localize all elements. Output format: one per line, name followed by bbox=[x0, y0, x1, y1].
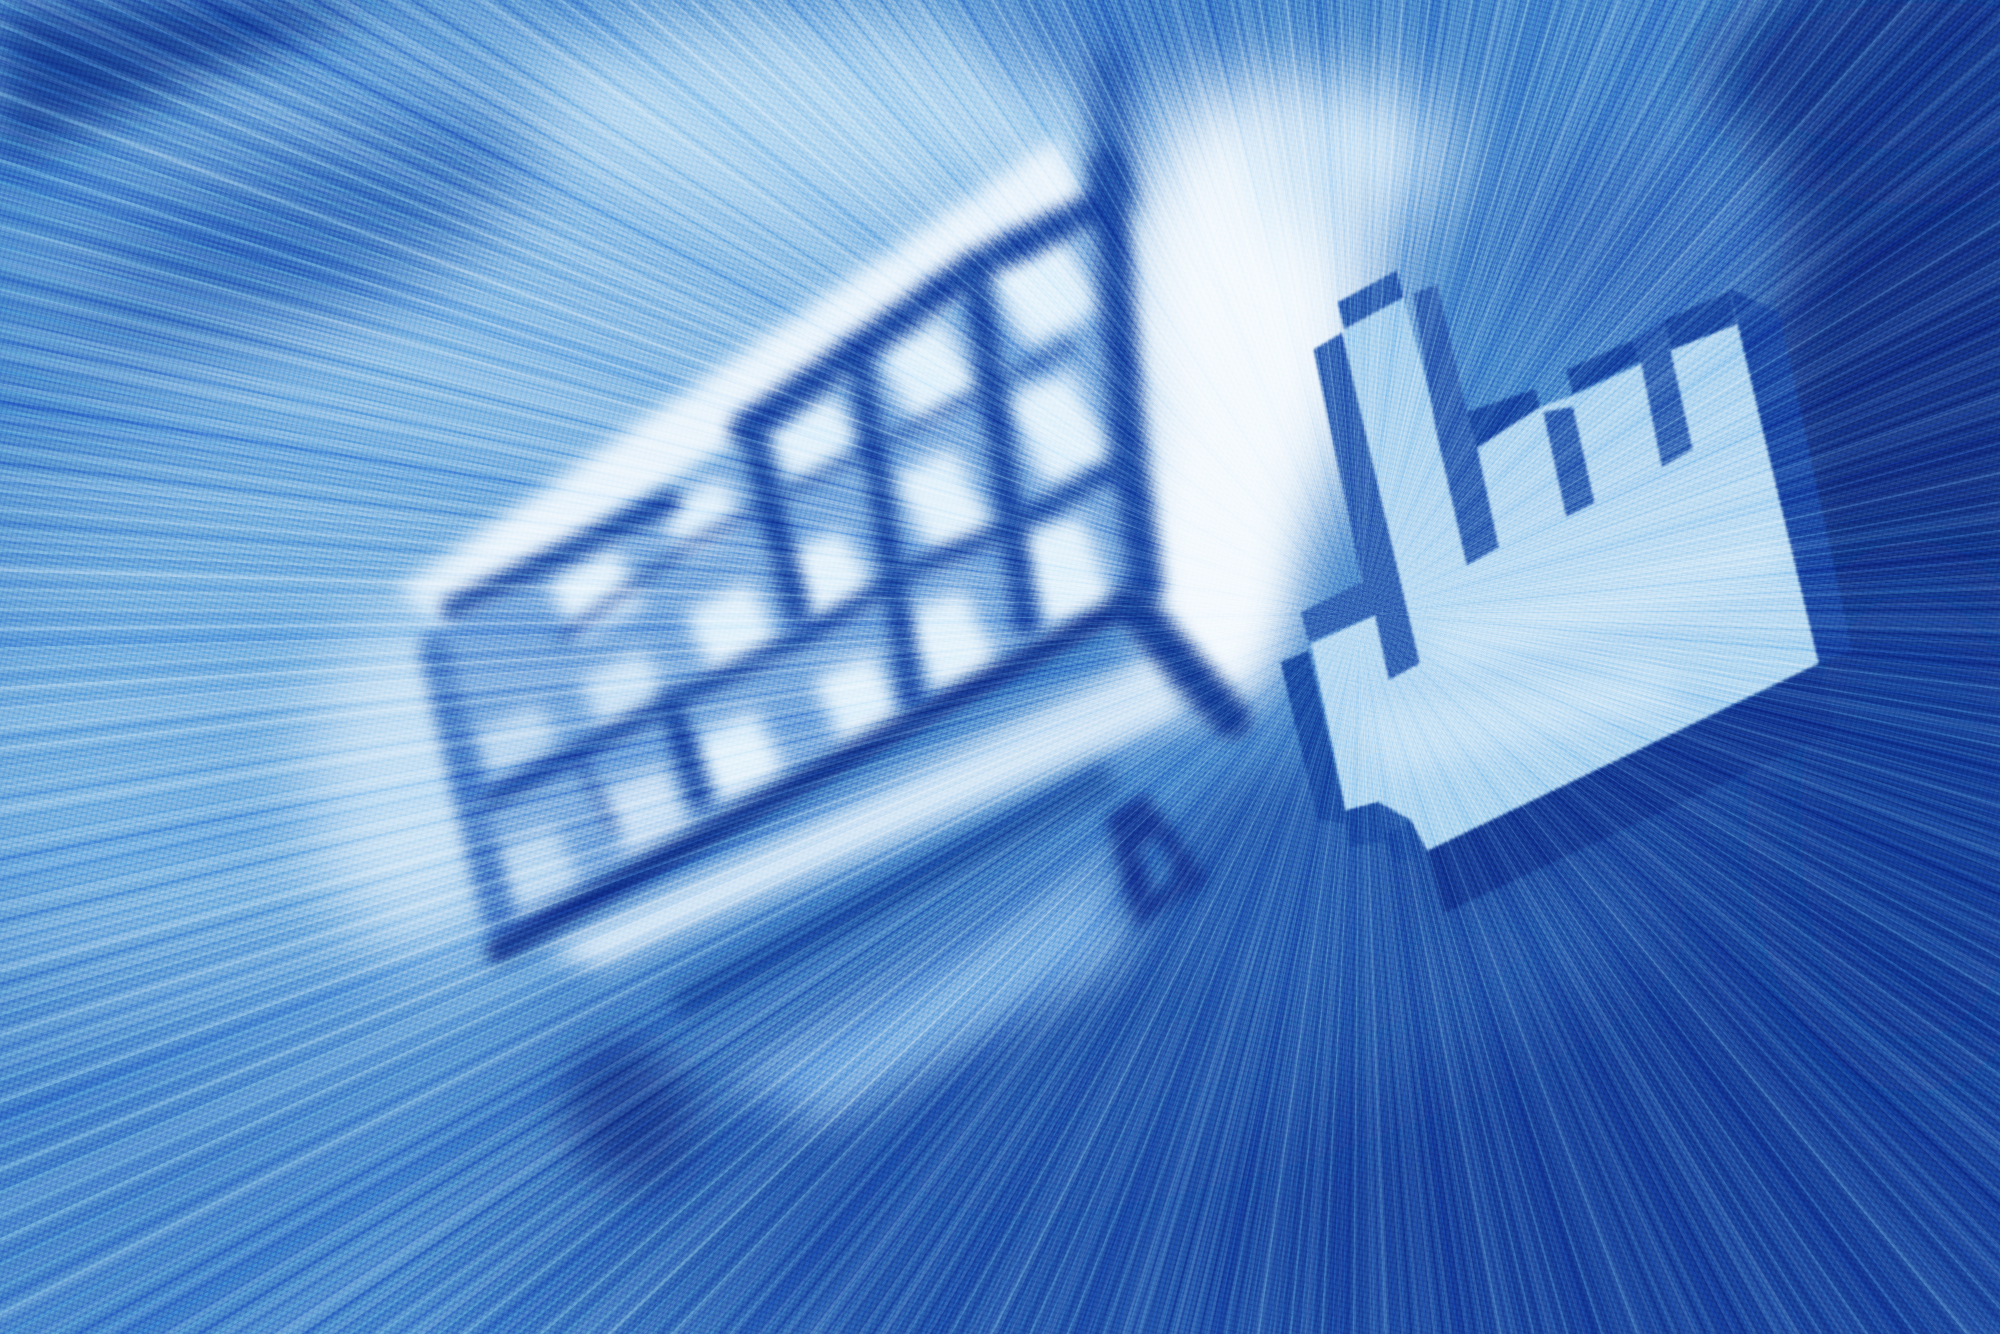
white glow behind cart bbox=[306, 77, 1454, 969]
top left hatch patch bbox=[35, 63, 552, 396]
hand highlight streaks bbox=[1352, 536, 1786, 778]
hand pixel wrist bbox=[1281, 650, 1421, 862]
cart rear wheel bbox=[542, 1022, 720, 1210]
hand outline bands bbox=[1301, 270, 1736, 680]
top left dark corner bbox=[0, 0, 383, 159]
hand bottom shadow band bbox=[1427, 666, 1835, 913]
cart blurred upper post bbox=[1105, 51, 1117, 210]
cart dark frame bbox=[435, 166, 1145, 915]
cart front wheel bbox=[1106, 793, 1209, 929]
cart basket fill bbox=[434, 230, 1148, 944]
shopping cart bbox=[434, 51, 1232, 1210]
cart bottom rail and wheel arm bbox=[497, 603, 1232, 950]
hand right shadow bbox=[1730, 288, 1852, 663]
cart bright grid cells bbox=[470, 225, 1118, 915]
cart lower rail bbox=[676, 777, 1112, 1008]
hand body bbox=[1311, 297, 1819, 851]
hand cursor icon bbox=[1281, 270, 1852, 913]
